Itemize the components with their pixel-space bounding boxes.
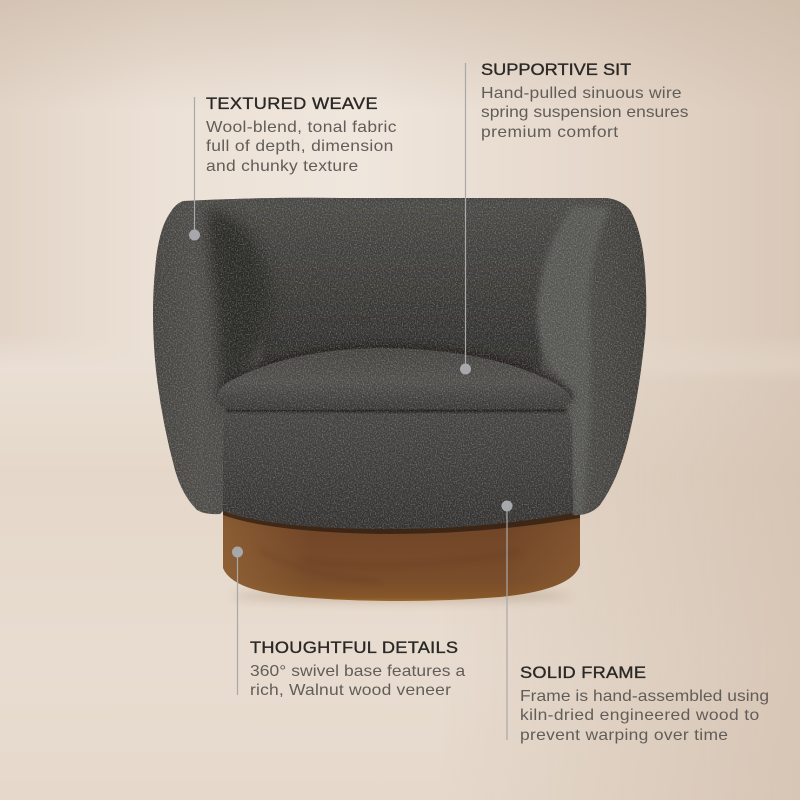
text: textured weave description xyxy=(206,119,397,175)
text: thoughtful details description: 360° swivel base features a xyxy=(250,663,465,680)
text: solid frame description: prevent warping over time xyxy=(520,727,728,744)
chair back xyxy=(225,198,575,370)
seat gap xyxy=(226,409,566,412)
callout: supportive sit xyxy=(481,60,688,141)
seat underside shadow xyxy=(223,505,580,534)
seat front panel xyxy=(223,413,573,529)
left arm inner shadow xyxy=(207,207,273,420)
text: solid frame description: Frame is hand-assembled using xyxy=(520,688,769,705)
callout: solid frame xyxy=(520,663,769,744)
floor shadow xyxy=(232,590,572,602)
left arm front crease xyxy=(220,400,224,514)
seat cushion xyxy=(217,348,570,410)
callout: textured weave xyxy=(206,94,397,175)
chair upholstery xyxy=(150,195,650,535)
callout line: solid frame xyxy=(502,500,512,740)
callout line: supportive sit xyxy=(460,63,471,374)
text: solid frame description xyxy=(520,688,769,744)
swivel wood base xyxy=(223,505,580,601)
text: supportive sit description: premium comfort xyxy=(481,124,619,141)
callout: thoughtful details xyxy=(250,638,466,699)
fabric weave texture xyxy=(150,195,650,535)
text: supportive sit description xyxy=(481,85,688,141)
chair body and outer arms xyxy=(150,195,650,530)
heading: solid frame: SOLID FRAME xyxy=(520,663,646,682)
heading: textured weave: TEXTURED WEAVE xyxy=(206,94,378,113)
text: textured weave description: and chunky texture xyxy=(206,158,358,175)
heading: thoughtful details: THOUGHTFUL DETAILS xyxy=(250,638,458,657)
callout line: textured weave xyxy=(189,97,200,240)
text: supportive sit description: Hand-pulled sinuous wire xyxy=(481,85,682,102)
text: solid frame description: kiln-dried engineered wood to xyxy=(520,707,760,724)
text: textured weave description: Wool-blend, tonal fabric xyxy=(206,119,397,136)
text: textured weave description: full of depth, dimension xyxy=(206,138,394,155)
callout line: thoughtful details xyxy=(232,546,243,695)
right arm inner panel xyxy=(537,206,610,515)
heading: supportive sit: SUPPORTIVE SIT xyxy=(481,60,631,79)
cushion contact shadow xyxy=(217,343,574,400)
armchair illustration xyxy=(150,195,650,602)
text: supportive sit description: spring suspension ensures xyxy=(481,104,688,121)
text: thoughtful details description xyxy=(250,663,466,699)
text: thoughtful details description: rich, Walnut wood veneer xyxy=(250,682,451,699)
